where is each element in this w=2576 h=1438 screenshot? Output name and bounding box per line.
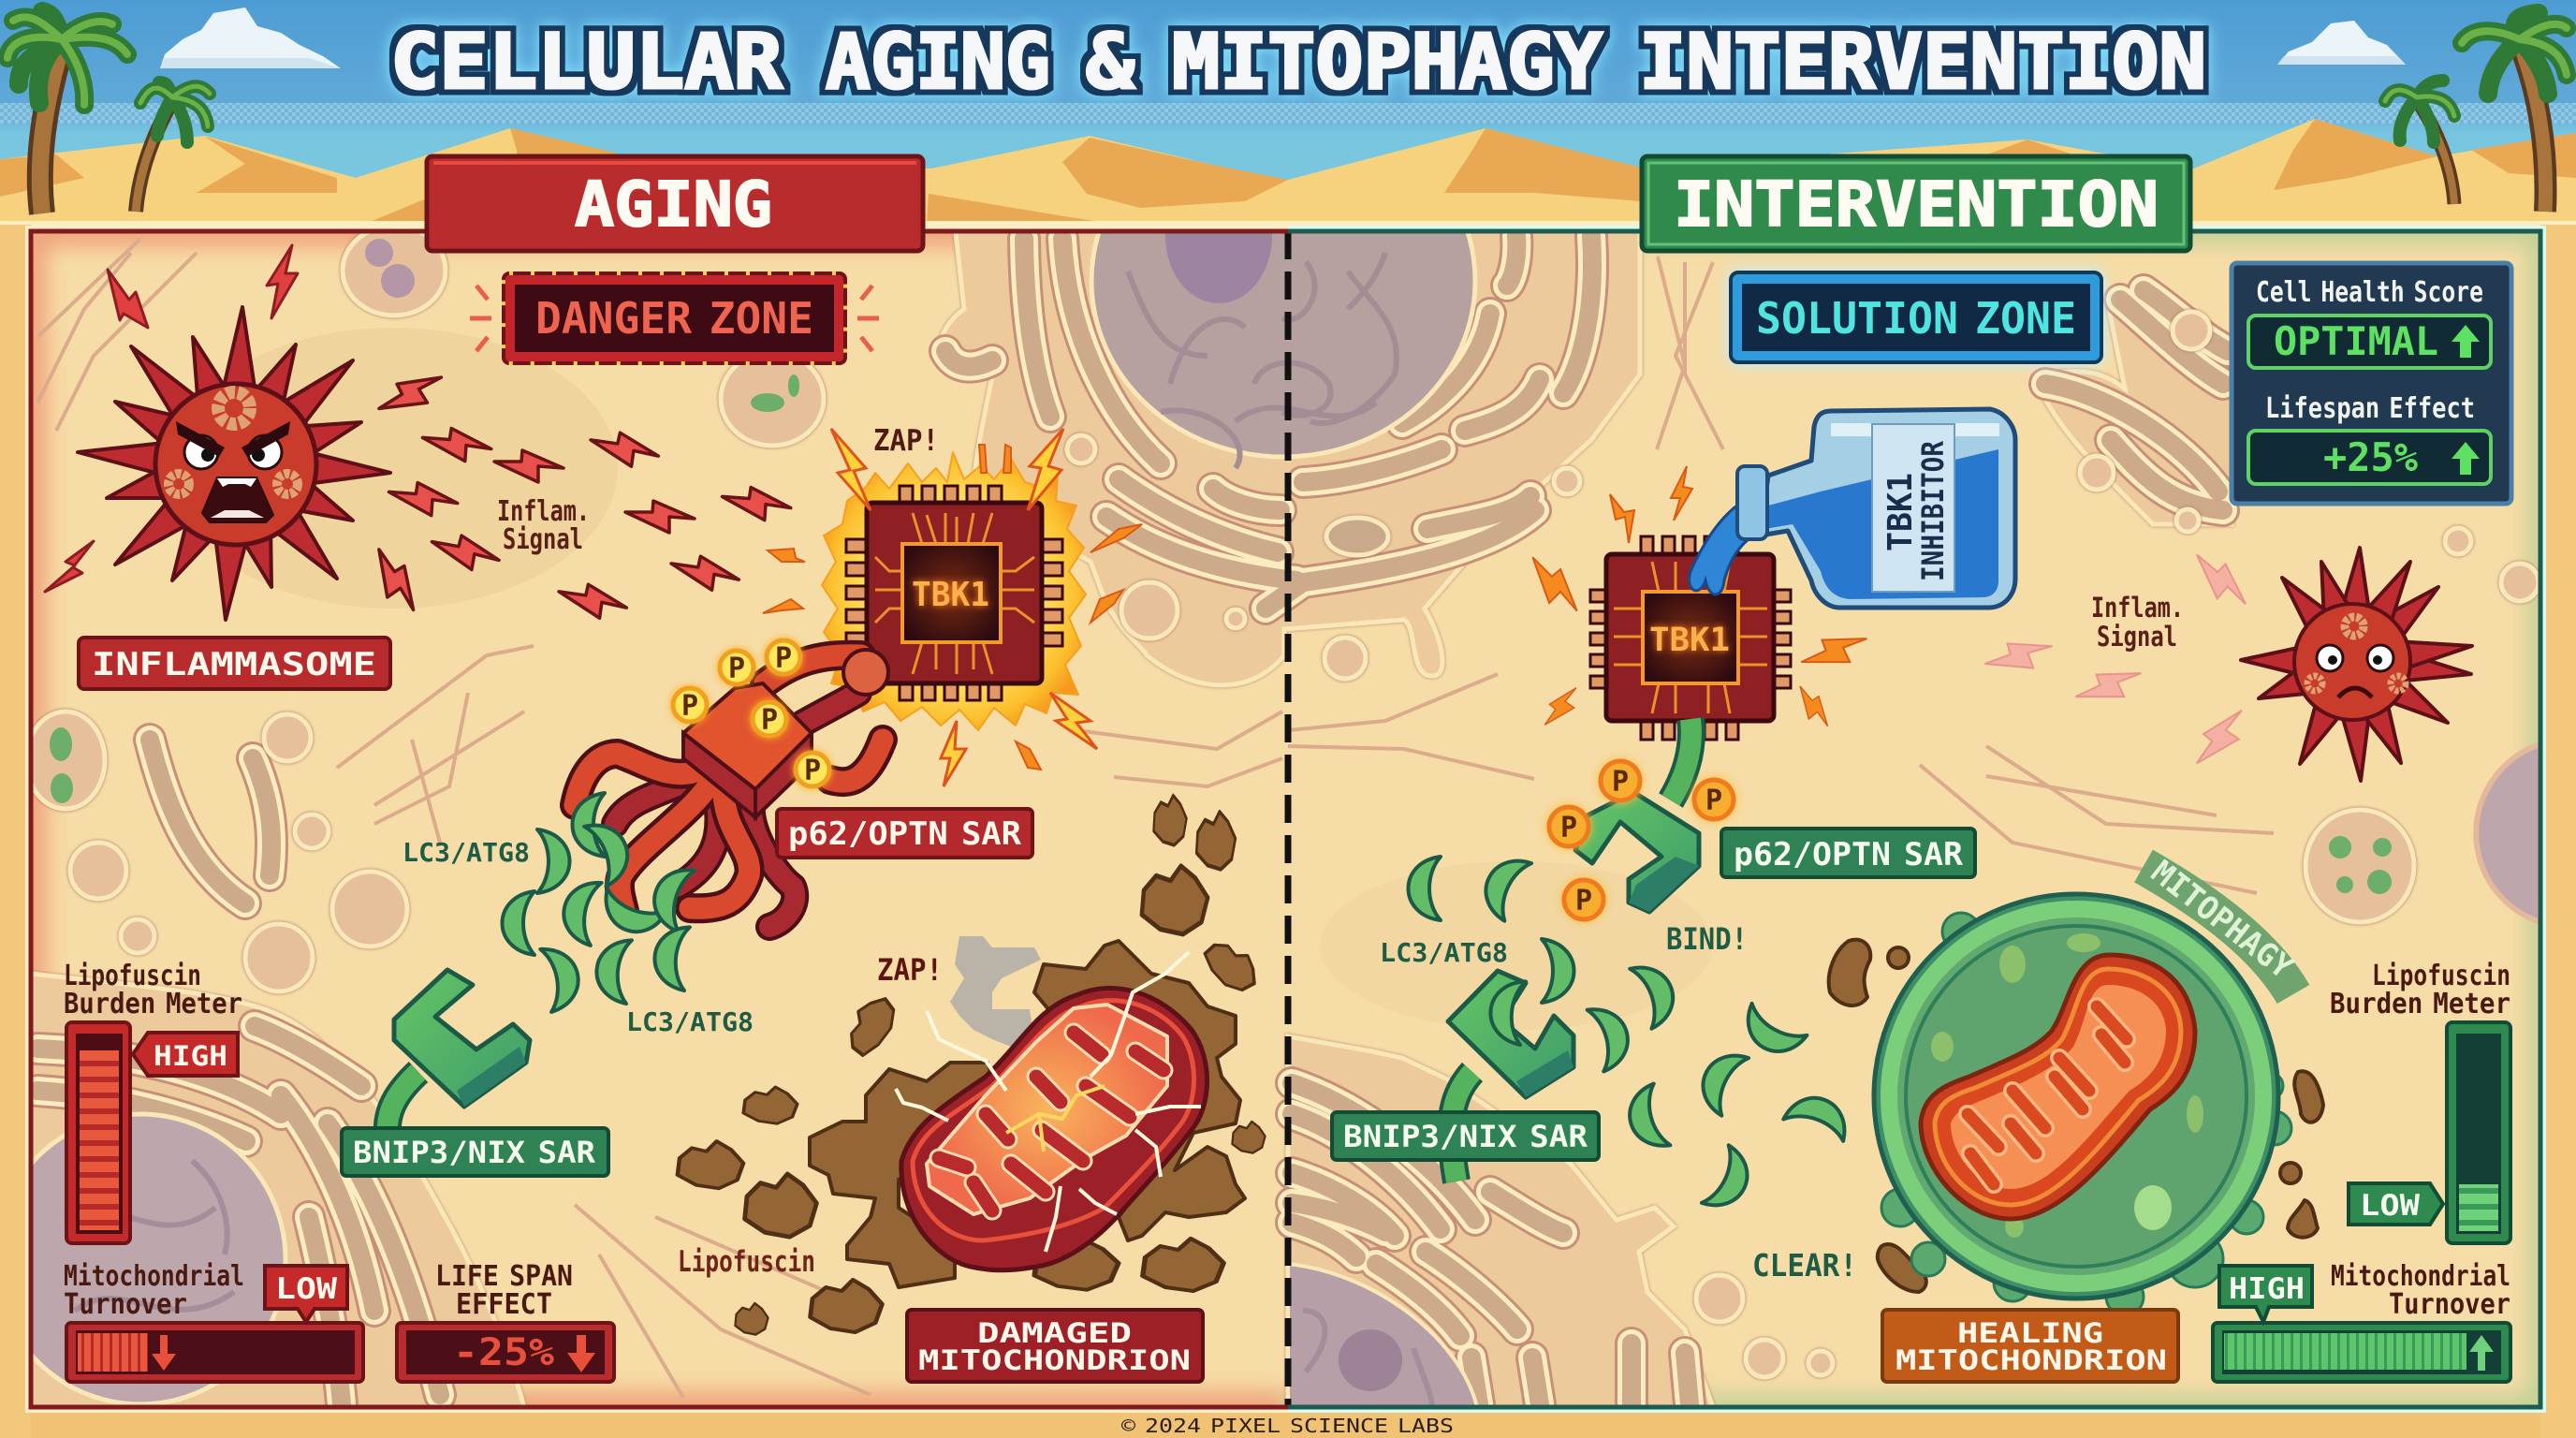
high tag: HIGH (154, 1040, 227, 1072)
cell health status panel (2232, 263, 2511, 504)
healing mitochondrion label: HEALING (1957, 1317, 2103, 1349)
meter title: Burden Meter (64, 988, 242, 1020)
banner: aging: AGING (575, 169, 772, 241)
bind label: BIND! (1666, 921, 1748, 957)
BNIP3/NIX label, intervention (1332, 1112, 1599, 1160)
icon: TBK1 chip, inhibited (1590, 536, 1791, 740)
phospho coins, aging: P (681, 690, 698, 723)
icon: damaged mitochondrion (896, 952, 1208, 1270)
turnover title: Turnover (2389, 1288, 2510, 1321)
title: AGING (826, 19, 1050, 107)
BNIP3 receptor wrench, intervention (1448, 971, 1573, 1181)
optimal readout: OPTIMAL (2274, 318, 2438, 364)
title: & (1086, 19, 1134, 107)
liquid stream (1690, 496, 1764, 594)
BNIP3/NIX label, aging: BNIP3/NIX SAR (353, 1135, 596, 1170)
optimal readout (2248, 315, 2491, 368)
palm tree: large right (2462, 13, 2567, 212)
lifespan readout (2248, 431, 2491, 484)
danger zone sign (470, 273, 879, 363)
bottle label text: TBK1 (1881, 473, 1920, 551)
healing mitochondrion (1921, 955, 2195, 1219)
turnover title: Mitochondrial (2331, 1260, 2510, 1293)
inflammasome label: INFLAMMASOME (92, 646, 376, 683)
LC3 label upper left: LC3/ATG8 (402, 837, 530, 868)
BNIP3 receptor wrench, aging (388, 970, 530, 1137)
phospho coins, aging: P (728, 653, 745, 685)
phospho coins, aging: P (775, 642, 792, 675)
p62/OPTN label, aging (777, 809, 1032, 858)
inflam signal label, right: Signal (2097, 621, 2177, 653)
LC3 crescents, intervention (1408, 850, 1854, 1216)
small orange sparks around chip (1518, 466, 1873, 733)
high tag: HIGH (2229, 1272, 2305, 1306)
center dashed divider (1284, 231, 1292, 1407)
phospho coins, intervention: P (1575, 885, 1592, 917)
lifespan readout: +25% (2323, 434, 2418, 480)
lipofuscin label: Lipofuscin (678, 1245, 815, 1279)
icon: active TBK1 chip: TBK1 (912, 576, 989, 614)
life span readout: -25% (453, 1331, 554, 1374)
bottle label text (1881, 440, 1951, 581)
meter bar low (2447, 1022, 2510, 1243)
phospho coins, aging: P (761, 704, 778, 737)
faded pink zaps (1981, 546, 2257, 775)
meter title: Lipofuscin (2372, 960, 2510, 992)
mitochondrial turnover meter, intervention (2213, 1260, 2510, 1382)
turnover title: Mitochondrial (64, 1260, 244, 1293)
lipofuscin debris, intervention (1829, 940, 2323, 1292)
icon: TBK1 chip, inhibited: TBK1 (1649, 622, 1730, 659)
cloud left (160, 7, 341, 68)
bottle label text: INHIBITOR (1915, 440, 1951, 581)
title: MITOPHAGY (1172, 19, 1603, 107)
mitochondrial turnover meter, aging (64, 1260, 363, 1382)
icon: tbk1 inhibitor bottle (1737, 409, 2015, 608)
phospho coins, aging: P (804, 755, 821, 787)
BNIP3/NIX label, aging (342, 1128, 608, 1176)
damaged mitochondrion label: MITOCHONDRION (918, 1344, 1191, 1376)
lipofuscin burden meter, aging (64, 960, 242, 1243)
LC3 label lower left: LC3/ATG8 (626, 1006, 754, 1037)
inflammasome zaps (45, 245, 792, 622)
banner: intervention: INTERVENTION (1674, 169, 2159, 241)
meter title: Lipofuscin (64, 960, 201, 992)
high tag (133, 1033, 238, 1076)
phospho coins, aging (673, 640, 829, 787)
icon: angry inflammasome (78, 307, 390, 620)
icon: active TBK1 chip (822, 452, 1086, 730)
life span title: EFFECT (456, 1288, 552, 1321)
lipofuscin burden meter, intervention (2330, 960, 2510, 1243)
phospho coins, intervention: P (1612, 766, 1629, 799)
solution zone sign (1731, 272, 2101, 362)
high tag (2219, 1266, 2312, 1322)
palm tree: small left (136, 82, 210, 212)
cloud right (2277, 21, 2406, 65)
low tag: LOW (275, 1272, 337, 1306)
chip sparks (763, 429, 1142, 786)
p62/OPTN label, intervention (1721, 829, 1975, 877)
icon: calmed inflammasome (2241, 548, 2472, 781)
inflammasome label (79, 638, 390, 689)
p62 receptor wrench, intervention (1575, 719, 1699, 912)
title: INTERVENTION (1639, 19, 2206, 107)
icon: autophagosome with healing mitochondrion (1874, 894, 2291, 1315)
danger zone sign: DANGER ZONE (535, 293, 813, 344)
damaged mitochondrion label (907, 1310, 1203, 1382)
background cell organelles (34, 234, 2539, 1404)
zap exclamation on mitochondrion: ZAP! (877, 952, 943, 988)
phospho coins, intervention: P (1705, 785, 1722, 817)
inflam signal label, right: Inflam. (2091, 592, 2184, 624)
low tag (2349, 1183, 2443, 1225)
life span readout (397, 1323, 614, 1382)
clear label: CLEAR! (1752, 1247, 1857, 1284)
solution zone sign: SOLUTION ZONE (1756, 293, 2076, 344)
low tag (265, 1266, 347, 1322)
healing mitochondrion label (1882, 1310, 2178, 1382)
damaged mitochondrion label: DAMAGED (977, 1317, 1132, 1349)
mitophagy ribbon: MITOPHAGY (2144, 854, 2300, 987)
cell health score label: Cell Health Score (2256, 276, 2483, 309)
banner: intervention (1642, 156, 2190, 251)
inflam signal label, left: Inflam. (497, 495, 590, 528)
title: CELLULAR (390, 19, 783, 107)
turnover bar low (66, 1323, 363, 1382)
meter title: Burden Meter (2330, 988, 2510, 1020)
healing mitochondrion label: MITOCHONDRION (1895, 1344, 2167, 1376)
LC3 crescents, aging (502, 793, 695, 1012)
life span title: LIFE SPAN (435, 1260, 573, 1293)
inflam signal label, left: Signal (503, 523, 583, 556)
turnover title: Turnover (64, 1288, 187, 1321)
p62/OPTN label, intervention: p62/OPTN SAR (1734, 836, 1964, 873)
BNIP3/NIX label, intervention: BNIP3/NIX SAR (1343, 1119, 1588, 1154)
p62/OPTN label, aging: p62/OPTN SAR (788, 815, 1022, 853)
desert sky background (0, 0, 2576, 243)
banner: aging (427, 156, 923, 251)
palm tree: large left (7, 11, 127, 213)
life span effect, aging (397, 1260, 614, 1382)
panel borders (31, 231, 2540, 1407)
palm tree: small right (2385, 81, 2454, 204)
smoke (950, 936, 1041, 1049)
phospho coins, intervention: P (1560, 812, 1577, 844)
turnover bar high (2213, 1323, 2510, 1382)
meter bar full (66, 1022, 130, 1243)
low tag: LOW (2360, 1189, 2420, 1223)
p62 claw, aging (575, 650, 888, 927)
copyright footer: © 2024 PIXEL SCIENCE LABS (1121, 1415, 1454, 1437)
title (390, 19, 2206, 107)
lipofuscin debris, aging (678, 796, 1266, 1335)
LC3 label, intervention: LC3/ATG8 (1380, 937, 1508, 968)
zap exclamation top: ZAP! (873, 424, 939, 458)
phospho coins, intervention (1549, 761, 1734, 919)
lifespan effect label: Lifespan Effect (2265, 392, 2475, 425)
